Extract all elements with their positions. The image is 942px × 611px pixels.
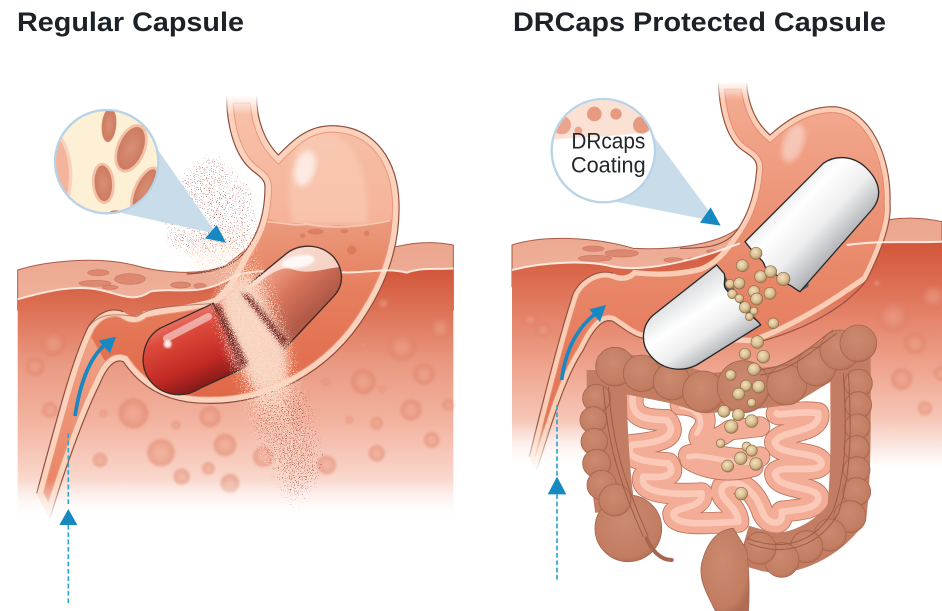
tissue membrane line xyxy=(18,268,453,299)
gastric acid xyxy=(91,220,392,396)
esophagus fade xyxy=(713,80,753,100)
panel: regular capsule illustration xyxy=(13,95,457,603)
upper capsule half xyxy=(745,158,879,292)
tissue membrane line xyxy=(512,242,942,270)
small intestine xyxy=(623,380,830,530)
dashed blue arrow up xyxy=(548,405,566,582)
curved blue arrow xyxy=(562,305,606,380)
magnifier callout xyxy=(47,107,217,234)
released pellets xyxy=(716,247,790,500)
pointer arrowhead xyxy=(700,207,721,226)
capsule gap powder haze xyxy=(218,277,287,390)
appendix xyxy=(647,538,672,560)
large intestine colon xyxy=(580,325,877,611)
stomach and duodenum xyxy=(529,83,890,470)
coating label: DRcaps xyxy=(571,129,645,154)
magnifier callout: Coating xyxy=(571,152,646,177)
dashed blue arrow up xyxy=(59,433,77,603)
regular capsule dissolving xyxy=(143,246,347,395)
body tissue background xyxy=(18,243,454,520)
fade at tissue bottom xyxy=(510,423,610,473)
body tissue background xyxy=(512,218,942,467)
pointer arrowhead xyxy=(205,225,226,243)
panel: DRCaps protected capsule illustration xyxy=(510,80,942,611)
magnifier callout xyxy=(550,99,717,222)
capsule torn edge speckle xyxy=(211,292,289,369)
capsule interior xyxy=(745,237,810,292)
title: DRCaps Protected Capsule: DRCaps Protected Capsule xyxy=(513,7,886,37)
curved blue arrow xyxy=(75,337,116,416)
fade at bottom xyxy=(13,480,457,522)
lower capsule half xyxy=(643,265,761,369)
dark powder scatter xyxy=(167,157,320,507)
powder cloud xyxy=(187,230,310,487)
stomach and duodenum xyxy=(37,97,400,518)
title: Regular Capsule: Regular Capsule xyxy=(17,7,244,37)
white coated capsule xyxy=(643,158,879,369)
